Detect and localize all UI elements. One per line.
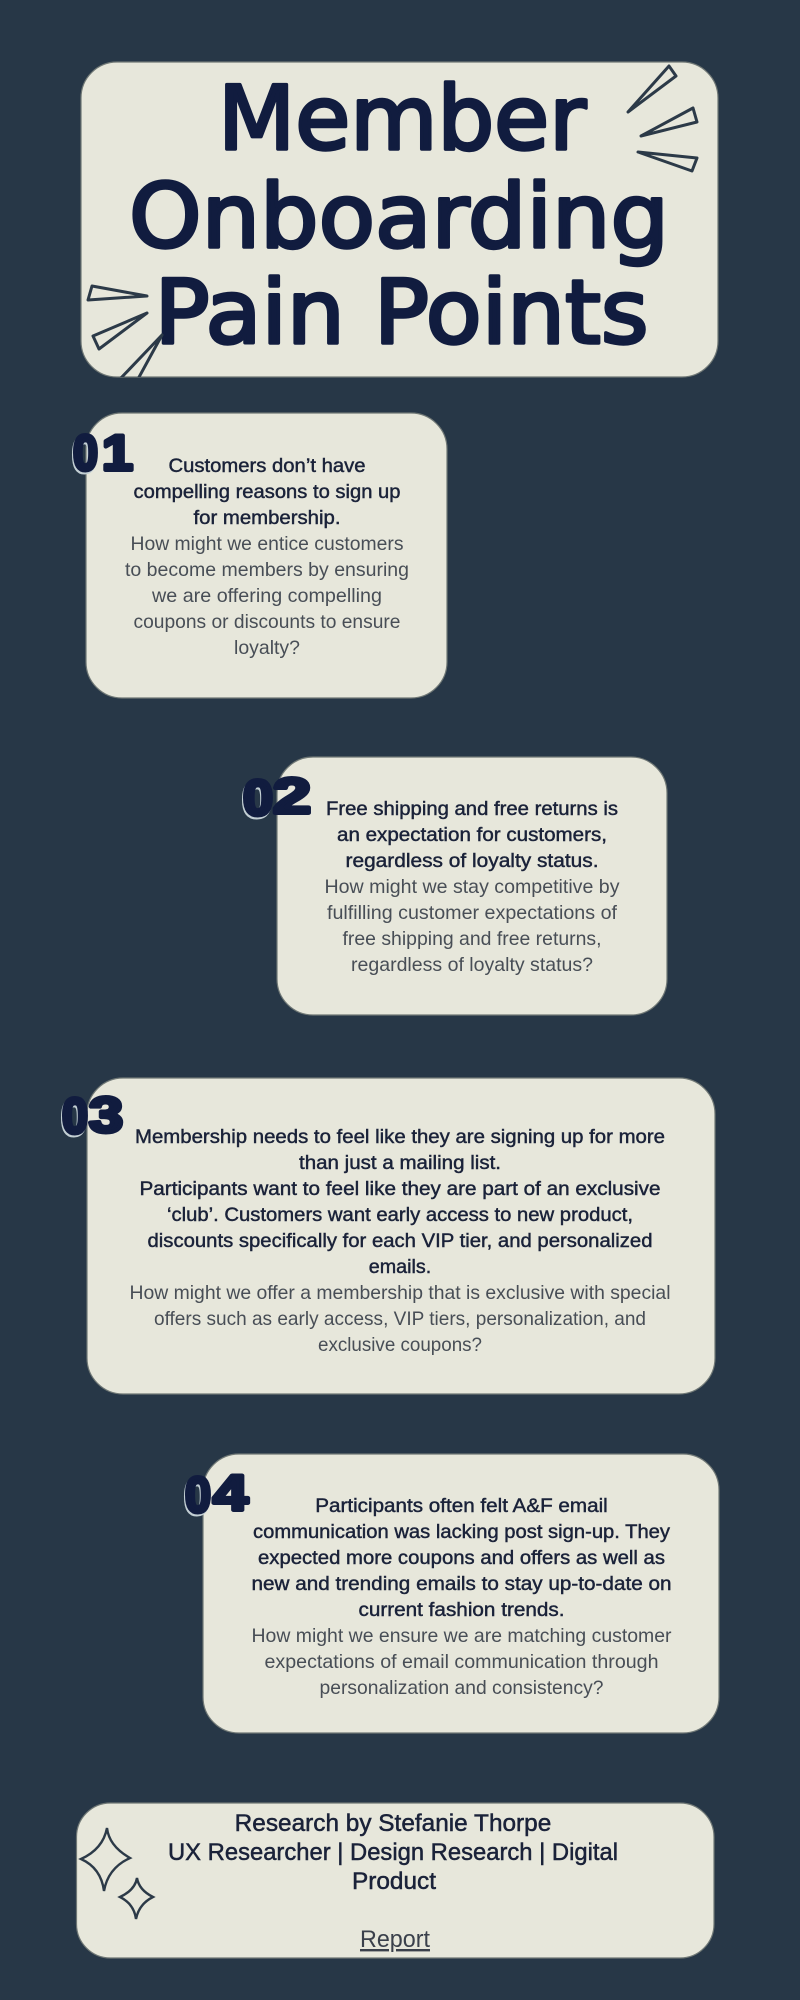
title: Onboarding	[129, 165, 669, 268]
how might we question: offers such as early access, VIP tiers, personalization, and	[154, 1308, 646, 1330]
pain point statement: compelling reasons to sign up	[134, 481, 401, 503]
how might we question: free shipping and free returns,	[342, 928, 602, 950]
panel: pain point 02	[242, 757, 667, 1015]
panel: footer credits	[76, 1803, 714, 1958]
number 04: 0	[185, 1467, 211, 1523]
pain point statement: discounts specifically for each VIP tier, and personalized	[148, 1230, 652, 1252]
number 02	[242, 768, 311, 828]
how might we question: we are offering compelling	[151, 585, 382, 607]
number 02: 0	[243, 770, 273, 826]
icon: small sparkle	[120, 1878, 153, 1919]
title: Pain Points	[154, 261, 648, 364]
pain point statement	[135, 1126, 665, 1278]
number 04: 4	[213, 1465, 248, 1521]
how might we question: personalization and consistency?	[320, 1677, 604, 1699]
pain point statement: emails.	[369, 1256, 431, 1278]
pain point statement: ‘club’. Customers want early access to new product,	[167, 1204, 633, 1226]
how might we question	[125, 533, 409, 659]
panel: pain point 01	[72, 413, 447, 698]
number 03: 0	[62, 1088, 88, 1144]
pain point statement	[134, 455, 401, 529]
number 03: 0	[61, 1090, 87, 1146]
credits text	[168, 1810, 618, 1895]
how might we question: fulfilling customer expectations of	[327, 902, 618, 924]
report link text: Report	[360, 1926, 430, 1953]
number 02: 0	[242, 772, 272, 828]
number 01	[72, 425, 133, 483]
how might we question: to become members by ensuring	[125, 559, 409, 581]
pain point statement: Participants often felt A&F email	[315, 1495, 608, 1517]
title	[129, 67, 669, 364]
pain point statement: Free shipping and free returns is	[326, 798, 618, 820]
how might we question: How might we offer a membership that is exclusive with special	[130, 1282, 670, 1304]
how might we question	[252, 1625, 672, 1699]
how might we question: How might we ensure we are matching customer	[252, 1625, 672, 1647]
pain point statement: Participants want to feel like they are part of an exclusive	[140, 1178, 660, 1200]
title: Member	[218, 67, 587, 170]
pain point statement: regardless of loyalty status.	[346, 850, 598, 872]
number 01: 0	[72, 427, 97, 483]
how might we question	[130, 1282, 670, 1356]
how might we question: How might we entice customers	[130, 533, 404, 555]
number 04	[184, 1465, 248, 1525]
icon: top right burst rays	[628, 66, 697, 171]
pain point statement: communication was lacking post sign-up. They	[253, 1521, 670, 1543]
panel: title card	[81, 62, 718, 379]
pain point statement: Membership needs to feel like they are signing up for more	[135, 1126, 665, 1148]
how might we question: exclusive coupons?	[318, 1334, 482, 1356]
number 04: 0	[184, 1469, 210, 1525]
how might we question: loyalty?	[234, 637, 300, 659]
pain point statement: new and trending emails to stay up-to-date on	[252, 1573, 672, 1595]
number 02: 2	[273, 768, 311, 824]
number 01: 1	[102, 425, 133, 481]
how might we question: expectations of email communication through	[264, 1651, 658, 1673]
pain point statement	[326, 798, 618, 872]
pain point statement: current fashion trends.	[358, 1599, 564, 1621]
pain point statement: for membership.	[194, 507, 340, 529]
how might we question: regardless of loyalty status?	[351, 954, 593, 976]
pain point statement: an expectation for customers,	[337, 824, 607, 846]
pain point statement: Customers don’t have	[168, 455, 366, 477]
credits text: Research by Stefanie Thorpe	[235, 1810, 551, 1837]
pain point statement: than just a mailing list.	[299, 1152, 501, 1174]
pain point statement	[252, 1495, 672, 1621]
icon: bottom left burst rays	[88, 286, 162, 379]
how might we question: How might we stay competitive by	[324, 876, 620, 898]
number 01: 0	[73, 425, 98, 481]
credits text: Product	[352, 1868, 436, 1895]
credits text: UX Researcher | Design Research | Digital	[168, 1839, 618, 1866]
panel: pain point 03	[61, 1078, 715, 1394]
panel: pain point 04	[184, 1454, 719, 1733]
how might we question: coupons or discounts to ensure	[134, 611, 400, 633]
pain point statement: expected more coupons and offers as well as	[258, 1547, 665, 1569]
icon: large sparkle	[81, 1828, 130, 1891]
how might we question	[324, 876, 620, 976]
number 03: 3	[89, 1087, 123, 1143]
number 03	[61, 1087, 123, 1146]
